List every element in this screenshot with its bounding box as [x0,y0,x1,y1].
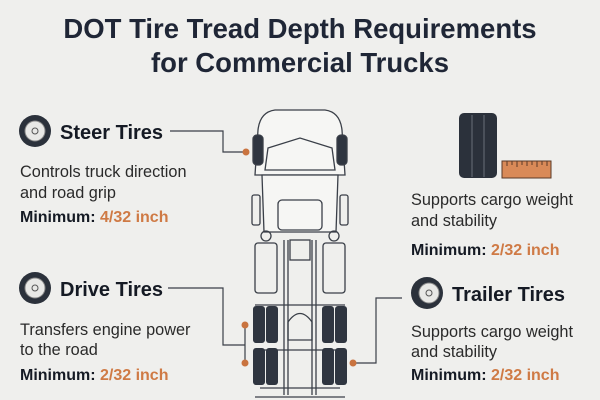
panel: steer tires [19,115,186,226]
icon: tread and ruler [459,113,551,178]
text: steer description: and road grip [20,184,116,202]
text: drive minimum: Minimum: 2/32 inch [20,367,168,384]
icon: steer tire [19,115,51,147]
title: DOT Tire Tread Depth Requirements [63,13,537,44]
panel: trailer tires [411,277,573,384]
truck wheels [253,306,347,385]
text: steer minimum: Minimum: 4/32 inch [20,209,168,226]
panel: trailer tread [411,113,573,259]
text: minimum top: Minimum: 2/32 inch [411,242,559,259]
text: drive description: to the road [20,341,98,359]
arrow: steer leader [170,131,250,156]
panel: drive tires [19,272,191,384]
text: trailer description: Supports cargo weight [411,323,573,341]
truck diagram [252,110,348,397]
heading: trailer tires: Trailer Tires [452,284,565,306]
arrow: trailer leader [350,298,402,366]
icon: drive tire [19,272,51,304]
title [63,13,537,78]
text: trailer description top: Supports cargo weight [411,191,573,209]
icon: trailer tire [411,277,443,309]
text: trailer minimum: Minimum: 2/32 inch [411,367,559,384]
title: for Commercial Trucks [151,47,449,78]
heading: steer tires: Steer Tires [60,122,163,144]
text: steer description: Controls truck direction [20,163,186,181]
arrow: drive leader [168,288,248,366]
heading: drive tires: Drive Tires [60,279,163,301]
text: trailer description: and stability [411,343,498,361]
text: drive description: Transfers engine power [20,321,191,339]
text: trailer description top: and stability [411,212,498,230]
